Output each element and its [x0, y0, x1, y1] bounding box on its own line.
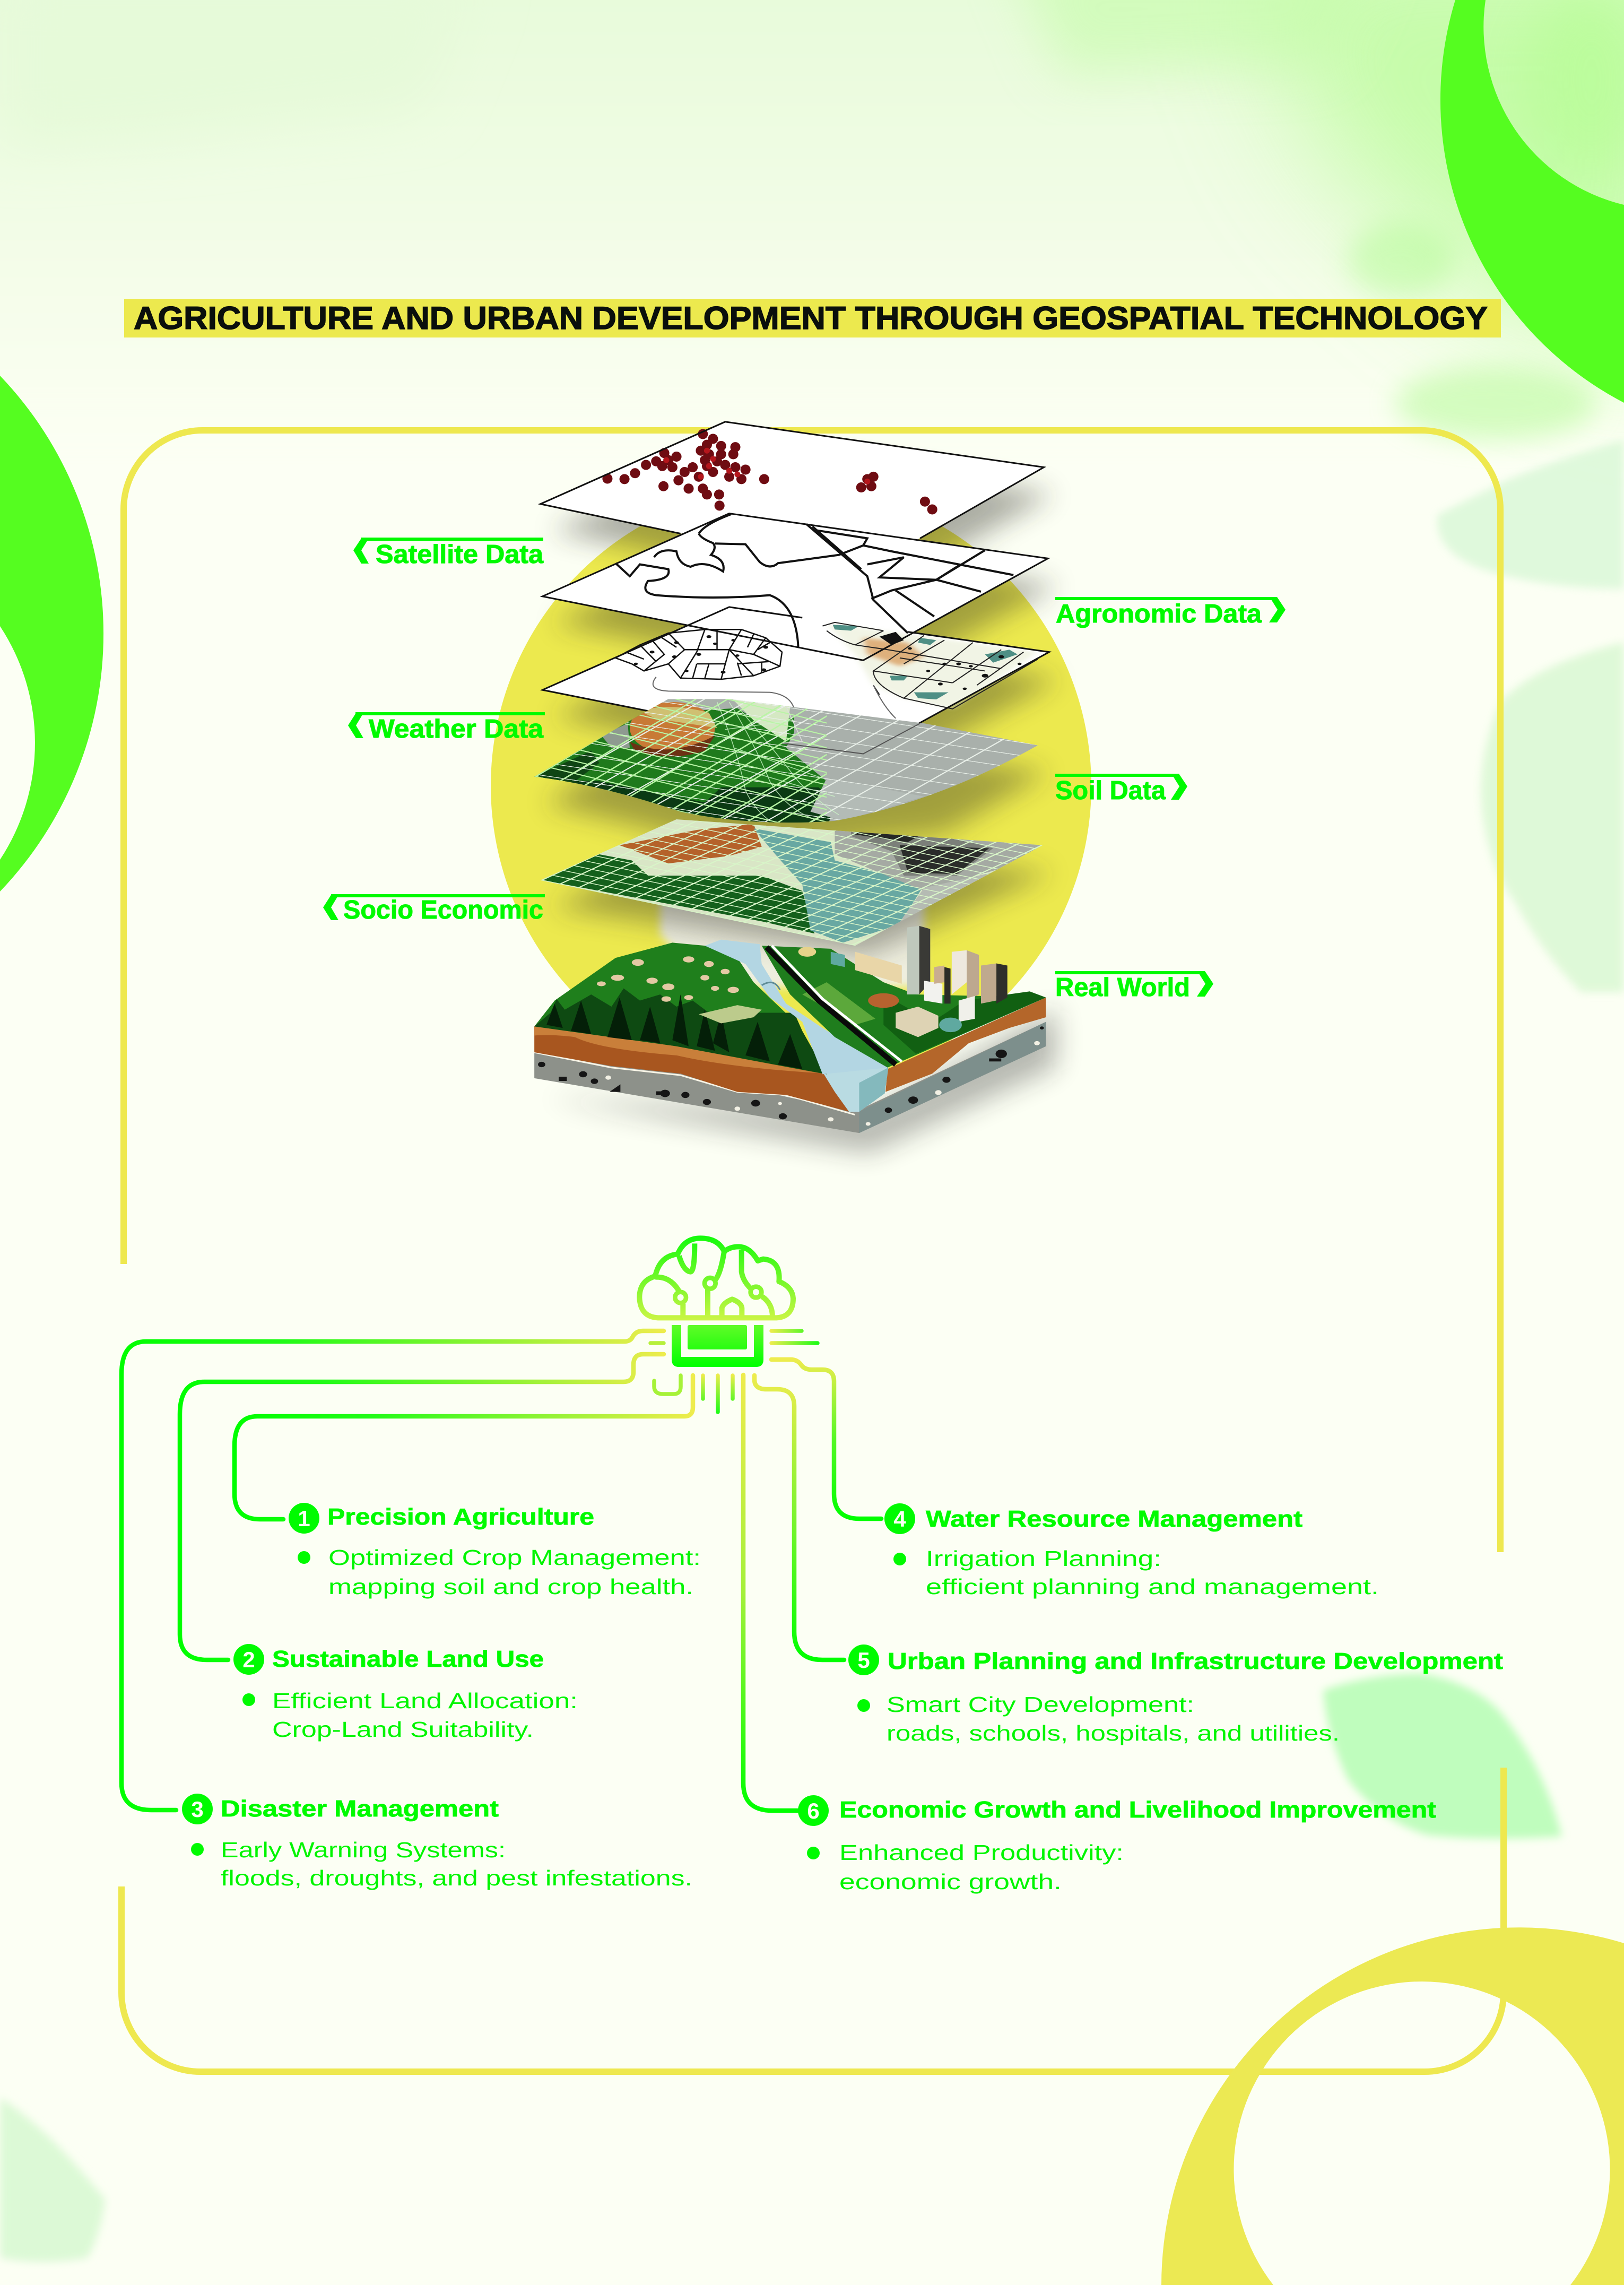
pale gap behind terrain — [660, 897, 924, 987]
circuit stubs — [650, 1331, 818, 1412]
brain outline — [639, 1238, 793, 1318]
layer 2 outline and roads — [542, 514, 1048, 660]
pale leaf: right — [1481, 642, 1624, 992]
item 2: Sustainable Land Use: Sustainable Land Use — [272, 1646, 544, 1672]
decorative arc: left — [0, 376, 103, 892]
item 1: Precision Agriculture — [289, 1503, 701, 1599]
water block — [823, 1068, 888, 1112]
item 6: Economic Growth and Livelihood Improvement: economic growth. — [839, 1869, 1062, 1894]
label: Socio Economic: Socio Economic — [343, 896, 543, 924]
item 4: Water Resource Management: Water Resource Management — [926, 1506, 1302, 1532]
layer 6: real world terrain block — [534, 926, 1046, 1133]
item 3: Disaster Management: floods, droughts, and pest infestations. — [221, 1866, 692, 1890]
title bar — [124, 299, 1501, 337]
layer 3 outline — [542, 607, 1049, 754]
outer frame: lower bracket — [121, 1768, 1504, 2072]
layer 1 sheet — [541, 422, 1044, 572]
buildings — [855, 952, 902, 984]
urban land — [762, 946, 1046, 1068]
layer 3 parcel tint — [827, 624, 1038, 709]
item 4: Water Resource Management — [884, 1503, 1379, 1599]
item 5: Urban Planning and Infrastructure Development: roads, schools, hospitals, and utilities. — [887, 1721, 1340, 1745]
item 1: Precision Agriculture: Precision Agriculture — [327, 1504, 594, 1530]
layers 1 to 3: point, road and parcel maps — [541, 422, 1049, 754]
item 1: Precision Agriculture: Optimized Crop Management: — [328, 1545, 701, 1570]
layer 3 sheet — [542, 607, 1049, 754]
parcel cells — [615, 629, 782, 679]
item 3: Disaster Management — [182, 1794, 692, 1890]
item 3: Disaster Management: Early Warning Systems: — [221, 1838, 506, 1862]
label: Weather Data: Weather Data — [369, 715, 544, 743]
item 2: Sustainable Land Use: Crop-Land Suitability. — [272, 1717, 534, 1742]
item 5: Urban Planning and Infrastructure Development: Smart City Development: — [887, 1692, 1194, 1717]
decorative arc: top right — [1440, 0, 1624, 403]
layer 4: warped weather grid — [534, 699, 1038, 823]
pale leaf: bottom left — [0, 2098, 105, 2262]
chip body — [672, 1325, 763, 1367]
item 5: Urban Planning and Infrastructure Development — [848, 1644, 1503, 1745]
decorative ring: bottom right — [1161, 1927, 1624, 2285]
item 4: Water Resource Management: Irrigation Planning: — [926, 1546, 1161, 1571]
houses on hill — [597, 956, 739, 1002]
label: Satellite Data: Satellite Data — [376, 540, 544, 569]
forest hill — [534, 942, 827, 1074]
layer 5: land cover grid — [540, 819, 1043, 946]
item 6: Economic Growth and Livelihood Improvement: Economic Growth and Livelihood Improvement — [839, 1797, 1436, 1823]
point data clusters — [607, 434, 932, 509]
item 6: Economic Growth and Livelihood Improvement: Enhanced Productivity: — [839, 1840, 1124, 1865]
item 5: Urban Planning and Infrastructure Development: 5 — [857, 1648, 870, 1673]
item 3: Disaster Management: Disaster Management — [221, 1796, 499, 1822]
layer 1 outline — [541, 422, 1044, 538]
terrain shadow — [545, 1008, 1056, 1153]
item 2: Sustainable Land Use: Efficient Land Allocation: — [272, 1689, 578, 1713]
yellow circle backdrop — [491, 486, 1091, 1086]
item 2: Sustainable Land Use — [233, 1644, 578, 1742]
road — [767, 947, 896, 1064]
item 3: Disaster Management: 3 — [191, 1797, 204, 1822]
layered geospatial map illustration — [491, 422, 1091, 1153]
item 1: Precision Agriculture: 1 — [298, 1506, 310, 1531]
connector lines — [121, 1331, 881, 1811]
title text: AGRICULTURE AND URBAN DEVELOPMENT THROUGH GEOSPATIAL TECHNOLOGY — [134, 300, 1488, 336]
pale leaf: lower right — [1323, 1674, 1562, 1839]
soil — [534, 1026, 855, 1113]
outer frame: upper bracket — [124, 430, 1500, 1552]
label: Agronomic Data: Agronomic Data — [1056, 600, 1262, 628]
pale leaf: upper right — [1437, 440, 1624, 589]
item 5: Urban Planning and Infrastructure Development: Urban Planning and Infrastructure Development — [888, 1648, 1503, 1674]
icon: brain on circuit chip — [639, 1238, 818, 1412]
layer 2 sheet — [542, 514, 1048, 660]
item 2: Sustainable Land Use: 2 — [242, 1647, 255, 1672]
item 6: Economic Growth and Livelihood Improvement — [798, 1795, 1436, 1894]
item 4: Water Resource Management: 4 — [893, 1507, 906, 1531]
river — [705, 940, 888, 1074]
layer shadows — [545, 448, 1059, 955]
item 6: Economic Growth and Livelihood Improvement: 6 — [807, 1798, 820, 1823]
item 4: Water Resource Management: efficient planning and management. — [926, 1574, 1379, 1599]
rock strata — [534, 1022, 1046, 1133]
label: Real World: Real World — [1055, 973, 1190, 1002]
item 1: Precision Agriculture: mapping soil and crop health. — [328, 1574, 693, 1599]
label: Soil Data: Soil Data — [1055, 776, 1166, 805]
